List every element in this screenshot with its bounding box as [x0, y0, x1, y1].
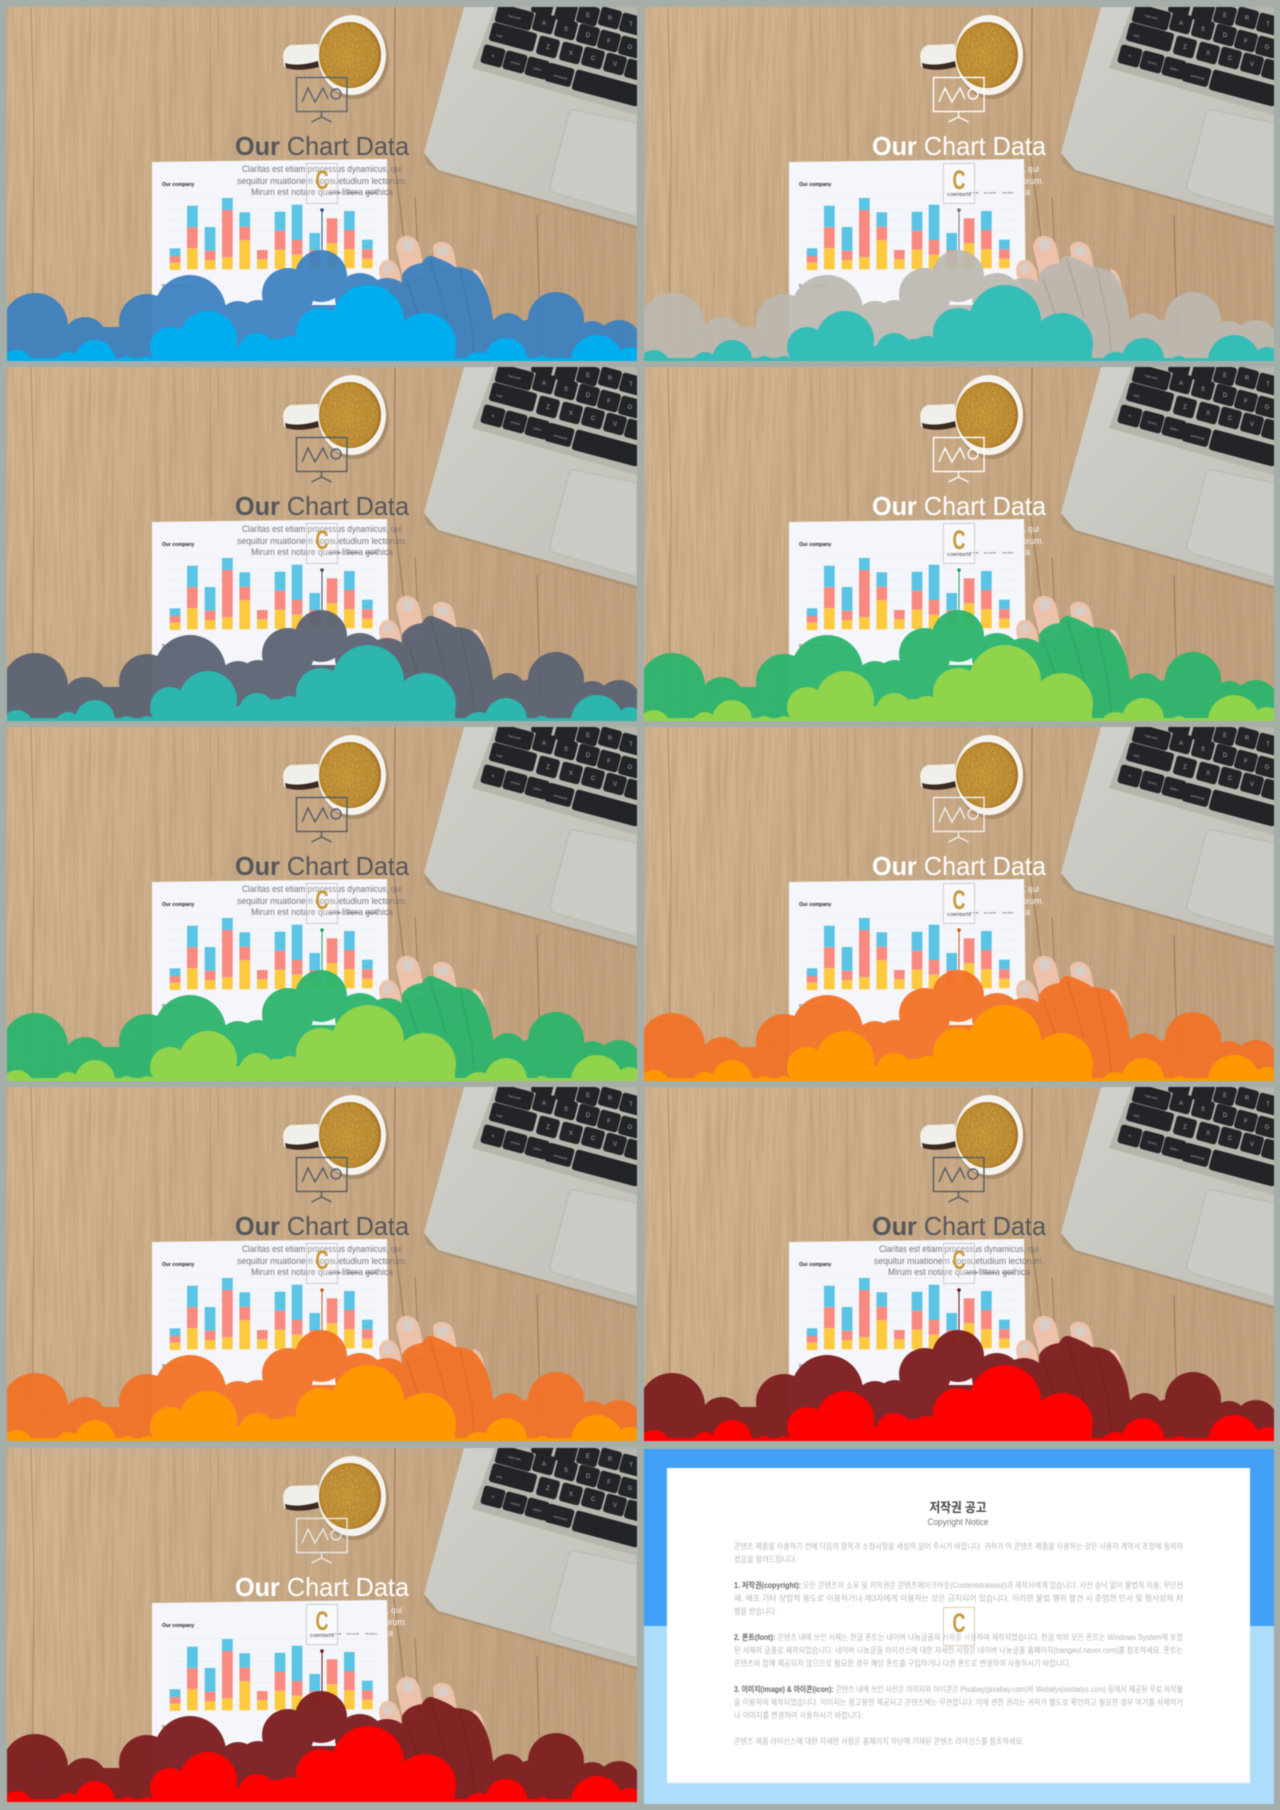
paragraph: sequitur muationem consuetudium lectorum.	[237, 1617, 407, 1628]
paragraph	[874, 884, 1044, 918]
title: Our Chart Data	[235, 1211, 410, 1241]
logo watermark	[944, 1608, 974, 1646]
hand creases	[406, 1700, 474, 1793]
desk photo with chart paper	[644, 713, 1280, 1081]
logo watermark: C	[952, 525, 966, 555]
panel: orange clouds, dark text	[1, 1073, 649, 1467]
logo watermark: CONTENTS	[947, 552, 971, 557]
light clouds	[1, 645, 645, 747]
icon: presentation board	[296, 438, 347, 482]
notice body text	[734, 1541, 1184, 1746]
blue background band	[644, 1449, 1274, 1626]
logo watermark: C	[316, 1245, 328, 1275]
title: Our Chart Data	[872, 851, 1047, 881]
paragraph: Claritas est etiam processus dynamicus, qui	[242, 884, 402, 895]
panel: orange clouds, white text	[638, 713, 1280, 1107]
paragraph: sequitur muationem consuetudium lectorum.	[237, 1256, 407, 1267]
logo watermark	[944, 884, 974, 924]
paragraph: Mirum est notare quam littera gothica	[251, 907, 394, 918]
logo watermark: C	[316, 165, 328, 195]
paragraph	[237, 1244, 407, 1278]
paragraph: Mirum est notare quam littera gothica	[888, 547, 1031, 558]
title: Our Chart Data	[872, 491, 1047, 521]
title: Our Chart Data	[235, 1572, 410, 1602]
dark clouds	[639, 970, 1278, 1084]
title: Our Chart Data	[235, 131, 410, 161]
paragraph: Claritas est etiam processus dynamicus, qui	[242, 164, 402, 175]
dark clouds	[2, 250, 641, 364]
light clouds	[638, 285, 1280, 387]
panel: red clouds, dark text	[638, 1073, 1280, 1467]
title: Our Chart Data	[872, 131, 1047, 161]
paragraph: sequitur muationem consuetudium lectorum.	[874, 536, 1044, 547]
logo watermark	[306, 1244, 338, 1284]
desk photo with chart paper	[644, 353, 1280, 721]
logo watermark	[944, 1244, 974, 1284]
desk photo with chart paper	[7, 1073, 649, 1441]
dark clouds	[639, 610, 1278, 724]
paragraph: sequitur muationem consuetudium lectorum.	[237, 536, 407, 547]
notice body text: 콘텐츠와 함께 제공되지 않으므로 필요한 경우 해당 폰트를 구입하거나 다른 폰트로 변경하여 사용하시기 바랍니다.	[734, 1658, 1071, 1668]
light clouds	[1, 285, 645, 387]
paragraph: sequitur muationem consuetudium lectorum.	[874, 1256, 1044, 1267]
logo watermark	[944, 524, 974, 564]
panel: slate and teal clouds	[1, 353, 649, 747]
paragraph: Claritas est etiam processus dynamicus, qui	[242, 1244, 402, 1255]
dark clouds	[639, 250, 1278, 364]
logo watermark: C	[316, 1606, 328, 1636]
light clouds	[638, 1365, 1280, 1467]
paragraph	[874, 524, 1044, 558]
chart pointer	[320, 568, 324, 610]
logo watermark: C	[316, 525, 328, 555]
logo watermark	[944, 164, 974, 204]
chart pointer	[957, 1288, 961, 1330]
logo watermark: CONTENTS	[947, 912, 971, 917]
dark clouds	[2, 970, 641, 1084]
paragraph	[237, 164, 407, 198]
icon: presentation board	[296, 1158, 347, 1202]
notice heading: 저작권 공고	[930, 1500, 987, 1515]
notice body text: 벌을 받습니다.	[734, 1606, 777, 1616]
paragraph: Mirum est notare quam littera gothica	[888, 187, 1031, 198]
logo watermark	[306, 524, 338, 564]
panel: red clouds, white text	[1, 1434, 649, 1810]
dark clouds	[2, 1330, 641, 1444]
panel: green clouds, white text	[638, 353, 1280, 747]
dark clouds	[2, 1691, 641, 1805]
paragraph: Mirum est notare quam littera gothica	[251, 1267, 394, 1278]
paragraph: Claritas est etiam processus dynamicus, qui	[879, 164, 1039, 175]
paragraph	[237, 524, 407, 558]
light clouds	[1, 1365, 645, 1467]
hand creases	[1043, 1339, 1111, 1432]
icon: presentation board	[296, 1518, 347, 1563]
light clouds	[638, 645, 1280, 747]
notice body text: 재, 배포 기타 상업적 용도로 이용하거나 제3자에게 이용하는 것은 금지되어 있습니다. 이러한 불법 행위 발견 시 준엄한 민사 및 형사상의 처	[734, 1593, 1183, 1603]
paragraph: sequitur muationem consuetudium lectorum.	[874, 176, 1044, 187]
notice subheading: Copyright Notice	[928, 1517, 988, 1527]
panel: green clouds, dark text	[1, 713, 649, 1107]
chart pointer	[320, 1649, 324, 1691]
logo watermark: C	[952, 1245, 966, 1275]
notice body text: 2. 폰트(font): 콘텐츠 내에 쓰인 서체는 한글 폰트는 네이버 나눔글꼴의 서체를 사용하여 제작되었습니다. 한글 외의 모든 폰트는 Windows System에 포함	[734, 1632, 1184, 1642]
notice body text: 1. 저작권(copyright): 모든 콘텐츠의 소유 및 저작권은 콘텐츠메이크아웃(Contentstokeout)과 제작사에게 있습니다. 사전 승낙 없이 불법적 이용, 무단전	[734, 1580, 1183, 1590]
light clouds	[1, 1005, 645, 1107]
logo watermark: C	[952, 885, 966, 915]
light clouds	[1, 1726, 645, 1810]
logo watermark: C	[952, 1608, 966, 1638]
logo watermark: CONTENTS	[947, 192, 971, 197]
notice body text: 3. 이미지(image) & 아이콘(icon): 콘텐츠 내에 쓰인 사진은 이미지와 아이콘은 Pixabay(pixabay.com)와 Webalys(webalys.com) 등에서 제공된 무료 저작물	[734, 1684, 1183, 1694]
logo watermark	[306, 1604, 338, 1644]
icon: presentation board	[296, 78, 347, 122]
title: Our Chart Data	[872, 1211, 1047, 1241]
desk photo with chart paper	[7, 713, 649, 1081]
light blue background band	[644, 1626, 1274, 1804]
hand creases	[1043, 619, 1111, 712]
paragraph: sequitur muationem consuetudium lectorum.	[237, 176, 407, 187]
chart pointer	[320, 208, 324, 250]
light clouds	[638, 1005, 1280, 1107]
icon: presentation board	[934, 798, 984, 842]
desk photo with chart paper	[7, 353, 649, 721]
hand creases	[406, 619, 474, 712]
paragraph: sequitur muationem consuetudium lectorum.	[237, 896, 407, 907]
paragraph: Mirum est notare quam littera gothica	[251, 547, 394, 558]
title: Our Chart Data	[235, 491, 410, 521]
notice body text: 콘텐츠 제품 라이선스에 대한 자세한 사항은 홈페이지 하단에 기재된 콘텐츠 라이선스를 참조하세요.	[734, 1736, 1024, 1746]
paragraph: sequitur muationem consuetudium lectorum.	[874, 896, 1044, 907]
paragraph	[237, 1605, 407, 1639]
dark clouds	[639, 1330, 1278, 1444]
hand creases	[1043, 979, 1111, 1072]
logo watermark: C	[952, 165, 966, 195]
icon: presentation board	[296, 798, 347, 842]
chart pointer	[957, 928, 961, 970]
paragraph: Mirum est notare quam littera gothica	[251, 187, 394, 198]
logo watermark: C	[316, 885, 328, 915]
panel: copyright notice	[644, 1449, 1274, 1804]
white notice card	[667, 1468, 1250, 1783]
paragraph: Mirum est notare quam littera gothica	[888, 907, 1031, 918]
paragraph: Mirum est notare quam littera gothica	[251, 1628, 394, 1639]
logo watermark	[306, 884, 338, 924]
panel: grey and teal clouds	[638, 0, 1280, 387]
logo watermark	[306, 164, 338, 204]
desk photo with chart paper	[7, 0, 649, 361]
dark clouds	[2, 610, 641, 724]
panel: blue clouds	[1, 0, 649, 387]
chart pointer	[957, 208, 961, 250]
paragraph	[874, 1244, 1044, 1278]
paragraph: Claritas est etiam processus dynamicus, qui	[879, 1244, 1039, 1255]
chart pointer	[957, 568, 961, 610]
icon: presentation board	[934, 1158, 984, 1202]
icon: presentation board	[934, 438, 984, 482]
hand creases	[406, 979, 474, 1072]
hand creases	[406, 1339, 474, 1432]
notice body text: 된 서체의 글꼴로 제작되었습니다. 네이버 나눔글꼴 라이선스에 대한 자세한 사항은 네이버 나눔글꼴 홈페이지(hangeul.naver.com)를 참조하세요. 폰트는	[734, 1645, 1183, 1655]
logo watermark: CONTENTS	[310, 1633, 334, 1638]
icon: presentation board	[934, 78, 984, 122]
chart pointer	[320, 928, 324, 970]
notice body text: 나 이미지를 변경하여 사용하시기 바랍니다.	[734, 1710, 863, 1720]
paragraph: Claritas est etiam processus dynamicus, qui	[879, 524, 1039, 535]
notice body text: 콘텐츠 제품을 사용하기 전에 다음의 항목과 소정사항을 세심히 읽어 주시기 바랍니다. 귀하가 이 콘텐츠 제품을 사용하는 것은 사용자 계약서 조항에 동의하	[734, 1541, 1184, 1551]
paragraph: Claritas est etiam processus dynamicus, qui	[879, 884, 1039, 895]
paragraph: Mirum est notare quam littera gothica	[888, 1267, 1031, 1278]
paragraph: Claritas est etiam processus dynamicus, qui	[242, 1605, 402, 1616]
hand creases	[406, 259, 474, 352]
desk photo with chart paper	[7, 1434, 649, 1802]
desk photo with chart paper	[644, 0, 1280, 361]
desk photo with chart paper	[644, 1073, 1280, 1441]
chart pointer	[320, 1288, 324, 1330]
paragraph: Claritas est etiam processus dynamicus, qui	[242, 524, 402, 535]
hand creases	[1043, 259, 1111, 352]
title: Our Chart Data	[235, 851, 410, 881]
notice body text: 셨음을 알려드립니다.	[734, 1554, 797, 1564]
notice body text: 을 이용하여 제작되었습니다. 이미지는 참고용만 제공되고 콘텐츠에는 무관합니다. 이에 관한 권리는 귀하가 별도로 확인하고 필요한 경우 여기를 삭제하거	[734, 1697, 1183, 1707]
paragraph	[874, 164, 1044, 198]
paragraph	[237, 884, 407, 918]
